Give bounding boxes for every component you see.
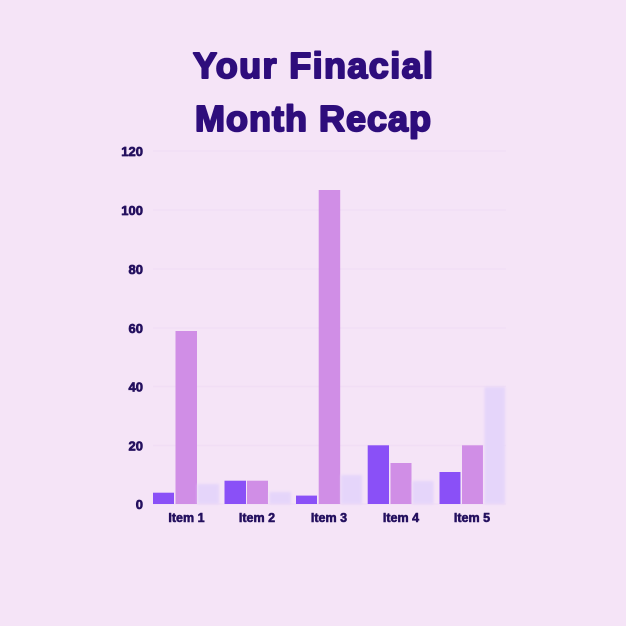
bars: Item 3 — [296, 190, 362, 504]
y-axis labels: 60 — [129, 321, 143, 336]
y-axis labels: 100 — [121, 203, 143, 218]
y-axis labels: 20 — [129, 438, 143, 454]
title: Your Finacial — [193, 45, 433, 86]
bars: Item 1 — [153, 331, 219, 504]
x-axis labels: Item 5 — [454, 511, 490, 525]
bars: Item 4 — [368, 445, 434, 504]
x-axis labels: Item 3 — [311, 511, 347, 525]
bars: Item 2 — [224, 481, 291, 504]
bar chart — [153, 190, 505, 504]
y-axis labels: 40 — [129, 380, 143, 394]
y-axis labels: 0 — [136, 497, 143, 512]
x-axis labels: Item 4 — [383, 511, 419, 525]
x-axis labels: Item 1 — [168, 511, 205, 525]
title — [193, 45, 433, 139]
y-axis labels: 80 — [129, 262, 143, 277]
bars: Item 5 — [440, 387, 505, 504]
y-axis labels — [121, 144, 143, 512]
x-axis labels: Item 2 — [239, 511, 275, 525]
title: Month Recap — [195, 98, 431, 139]
y-axis labels: 120 — [121, 144, 143, 159]
x-axis labels — [168, 511, 490, 525]
